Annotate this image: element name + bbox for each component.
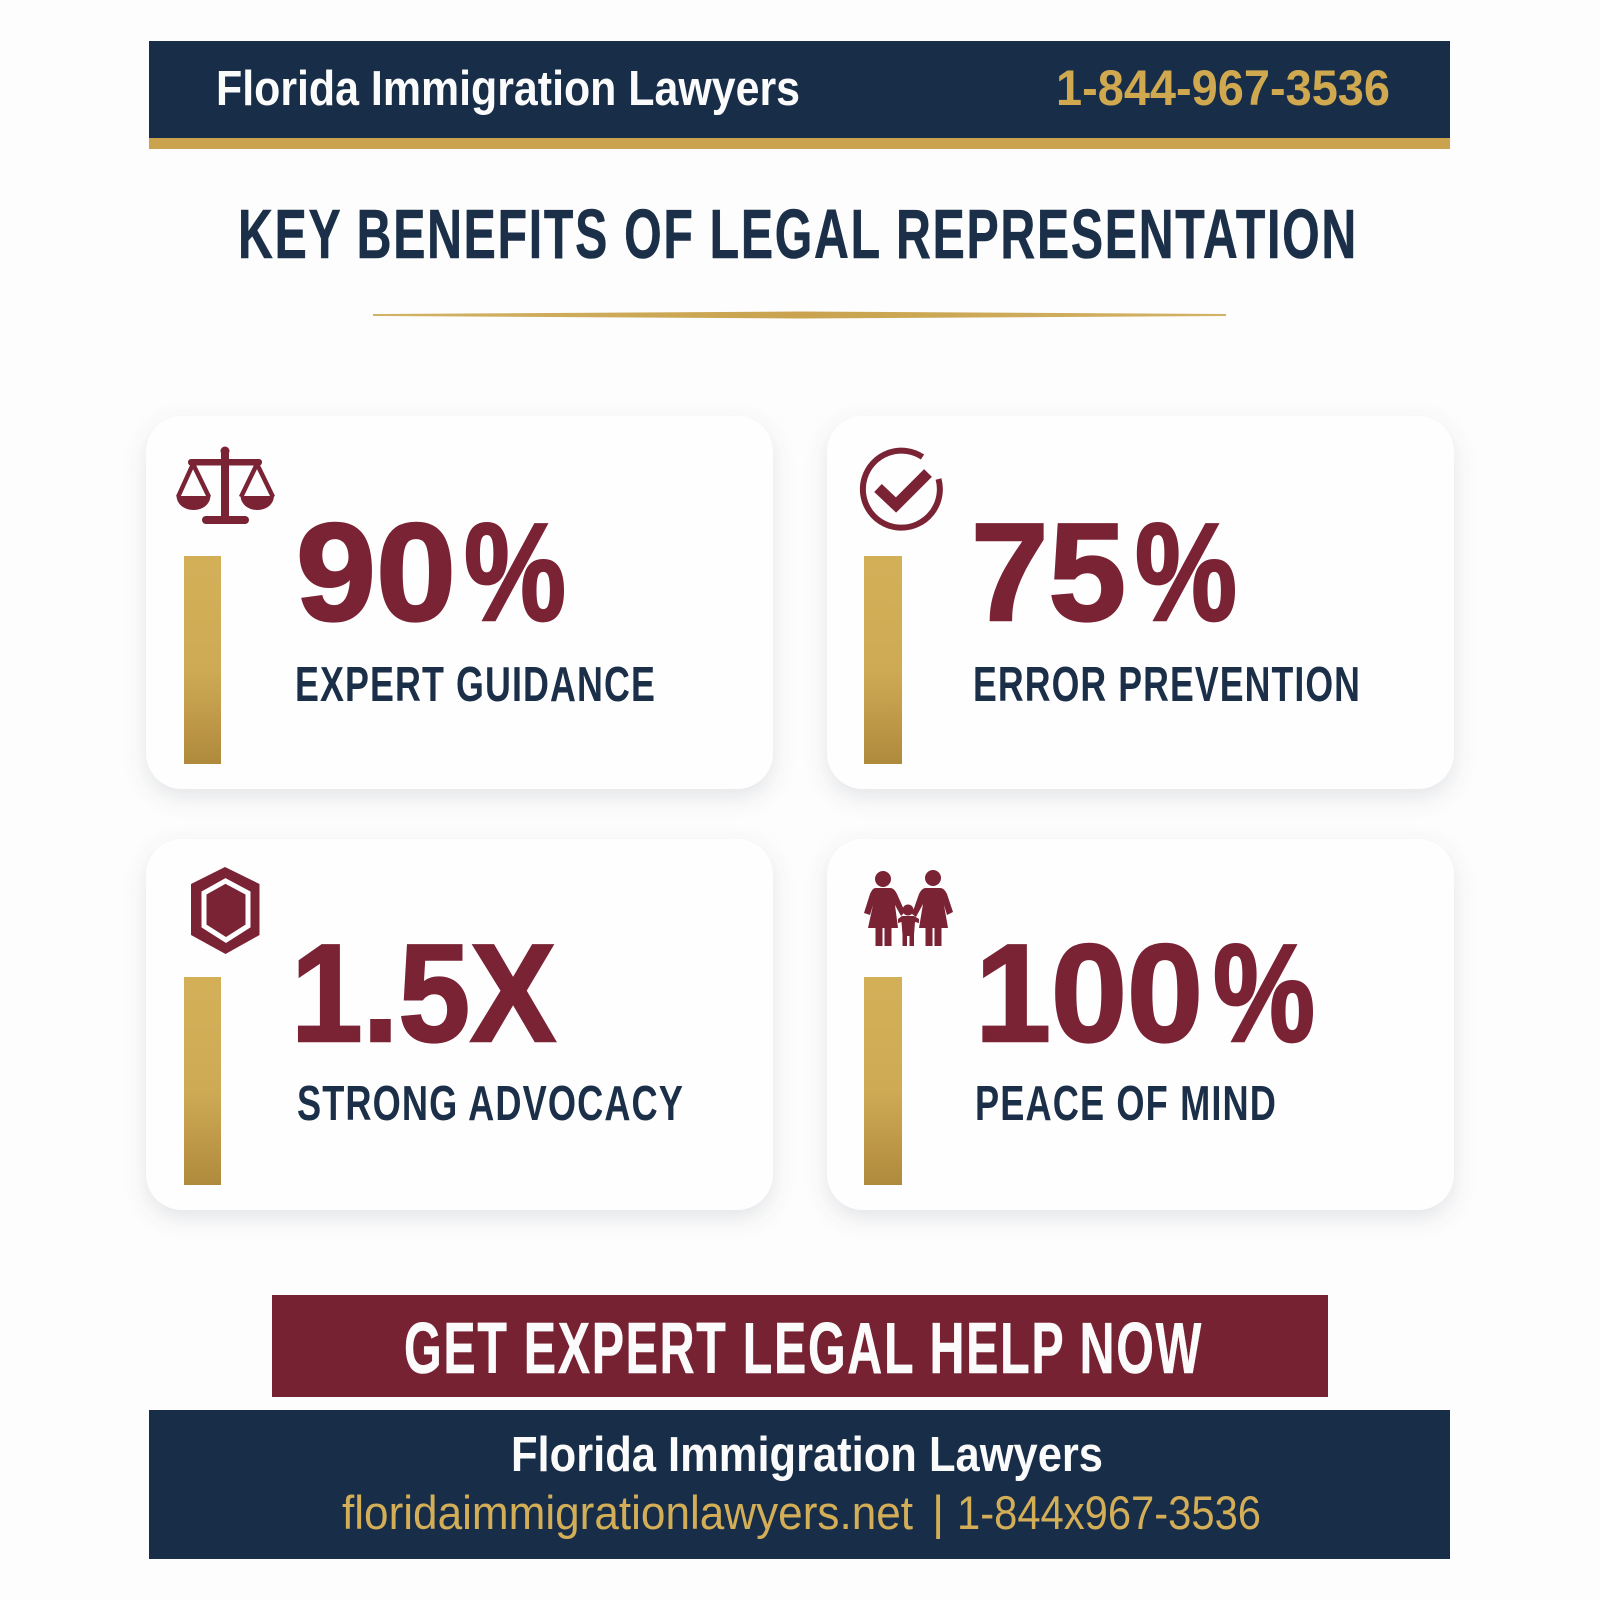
gold bar bbox=[184, 977, 221, 1185]
stat: 90%: 90 bbox=[296, 495, 456, 650]
header band bbox=[149, 41, 1450, 149]
gold bar bbox=[864, 556, 902, 764]
stat: 75%: 75 bbox=[971, 495, 1126, 650]
icon: family bbox=[864, 870, 953, 946]
icon: scales of justice bbox=[176, 446, 274, 524]
gold bar bbox=[864, 977, 902, 1185]
label: peace of mind: PEACE OF MIND bbox=[975, 1077, 1277, 1131]
footer contact line: floridaimmigrationlawyers.net bbox=[342, 1486, 913, 1539]
panel: peace of mind bbox=[827, 839, 1454, 1210]
stat: 75%: % bbox=[1135, 495, 1237, 650]
stat: 100% bbox=[975, 916, 1315, 1071]
stat: 100%: % bbox=[1213, 916, 1315, 1071]
gold bar bbox=[184, 556, 221, 764]
stat: 75% bbox=[971, 495, 1237, 650]
header firm name: Florida Immigration Lawyers bbox=[216, 62, 800, 116]
title underline bbox=[373, 312, 1226, 318]
footer contact line: | bbox=[932, 1486, 944, 1539]
stat: 1.5X: 1.5X bbox=[291, 916, 556, 1071]
footer band bbox=[149, 1410, 1450, 1559]
label: strong advocacy: STRONG ADVOCACY bbox=[297, 1077, 684, 1131]
icon: check in circle bbox=[863, 451, 940, 528]
stat: 100%: 100 bbox=[975, 916, 1203, 1071]
header phone number: 1-844-967-3536 bbox=[1056, 60, 1390, 116]
label: expert guidance: EXPERT GUIDANCE bbox=[295, 658, 656, 712]
panel: error prevention bbox=[827, 416, 1454, 789]
call to action banner: GET EXPERT LEGAL HELP NOW bbox=[404, 1309, 1203, 1389]
panel: strong advocacy bbox=[146, 839, 773, 1210]
stat: 90% bbox=[296, 495, 566, 650]
call to action banner bbox=[272, 1295, 1328, 1397]
footer firm name: Florida Immigration Lawyers bbox=[511, 1428, 1103, 1482]
panel: expert guidance bbox=[146, 416, 773, 789]
footer contact line: 1-844x967-3536 bbox=[957, 1486, 1261, 1539]
stat: 90%: % bbox=[464, 495, 566, 650]
label: error prevention: ERROR PREVENTION bbox=[973, 658, 1361, 712]
icon: hexagon shield bbox=[191, 867, 260, 954]
footer contact line bbox=[342, 1486, 1261, 1539]
